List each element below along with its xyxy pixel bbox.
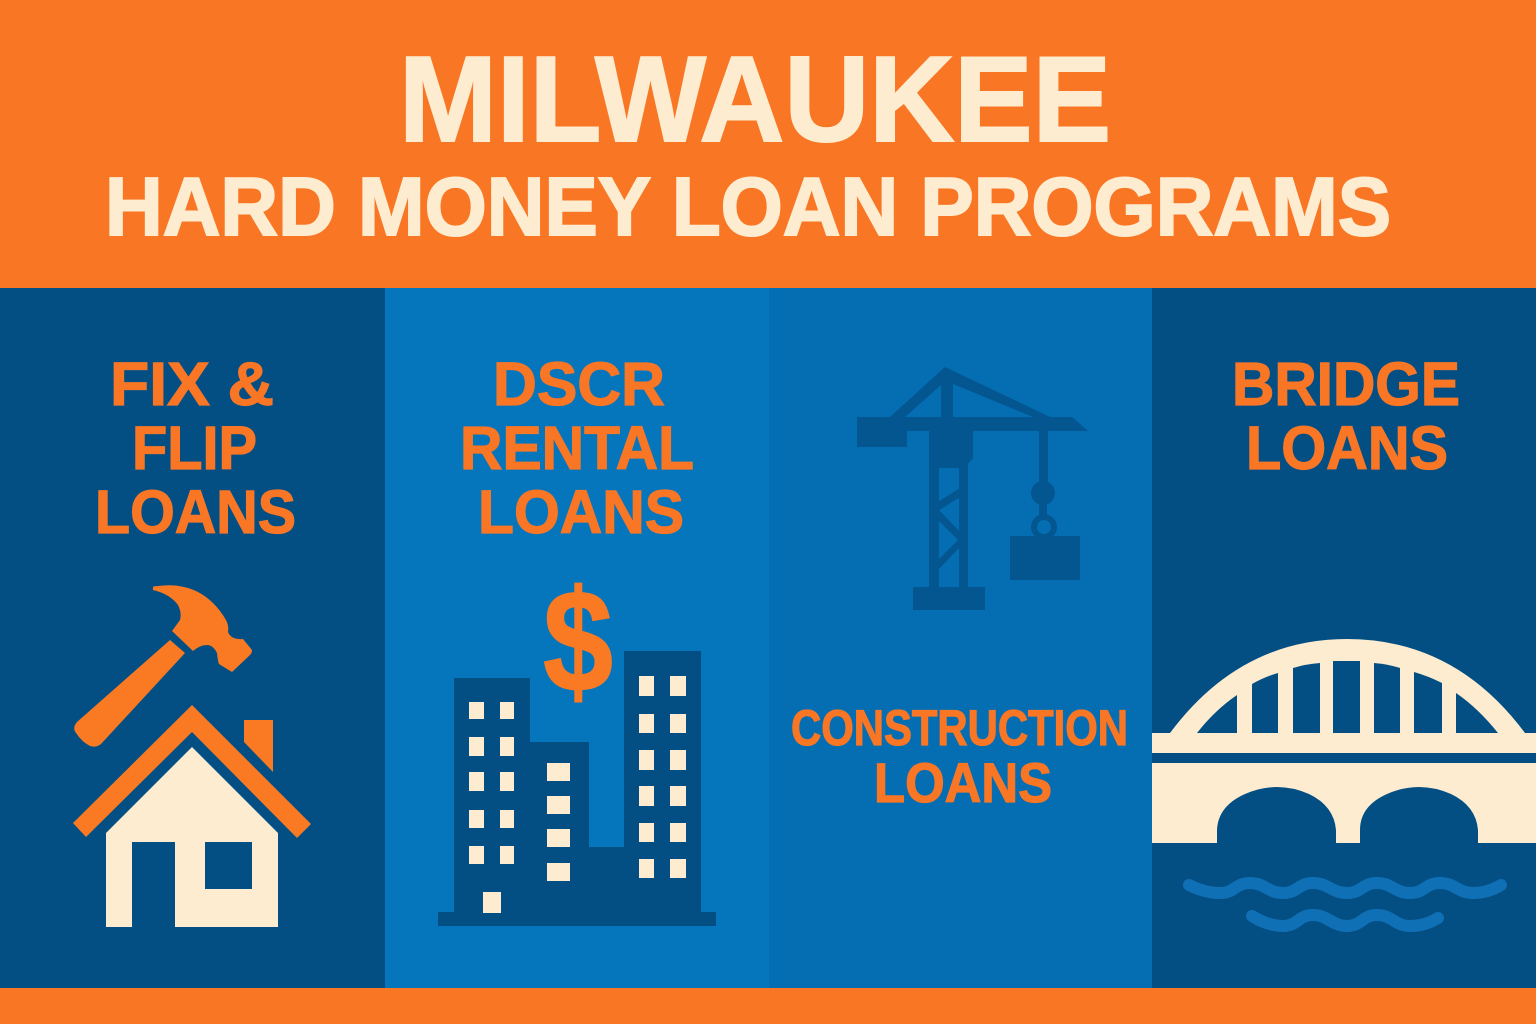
- heading: dscr rental loans: [460, 350, 694, 546]
- heading: construction loans: LOANS: [874, 751, 1052, 814]
- icon: tower crane: [857, 367, 1088, 610]
- icon: city buildings: [438, 651, 716, 926]
- panel: construction loans: [769, 288, 1152, 988]
- heading: dscr rental loans: RENTAL: [460, 414, 694, 482]
- heading: dscr rental loans: LOANS: [478, 478, 684, 546]
- panel: bridge loans: [1152, 288, 1536, 988]
- heading: bridge loans: LOANS: [1246, 414, 1448, 482]
- heading: dscr rental loans: DSCR: [493, 350, 665, 418]
- heading: construction loans: CONSTRUCTION: [791, 700, 1128, 756]
- heading: construction loans: [791, 700, 1128, 814]
- panel: dscr rental loans: [385, 288, 769, 988]
- heading: fix and flip loans: [95, 350, 296, 546]
- heading: bridge loans: [1232, 350, 1460, 482]
- panel: fix and flip loans: [0, 288, 385, 988]
- icon: dollar sign: $: [543, 560, 613, 722]
- icon: arch bridge: [1152, 639, 1536, 843]
- heading: fix and flip loans: LOANS: [95, 478, 296, 546]
- panel: header banner: [0, 0, 1536, 288]
- icon: water waves: [1189, 883, 1501, 926]
- heading: fix and flip loans: FIX &: [110, 350, 274, 418]
- icon: hammer: [74, 585, 252, 747]
- subtitle: Hard Money Loan Programs: HARD MONEY LOAN PROGRAMS: [105, 160, 1391, 253]
- heading: fix and flip loans: FLIP: [132, 414, 257, 482]
- title: Milwaukee: MILWAUKEE: [399, 31, 1111, 167]
- footer bar: [0, 988, 1536, 1024]
- icon: house with roof: [73, 705, 311, 927]
- heading: bridge loans: BRIDGE: [1232, 350, 1460, 418]
